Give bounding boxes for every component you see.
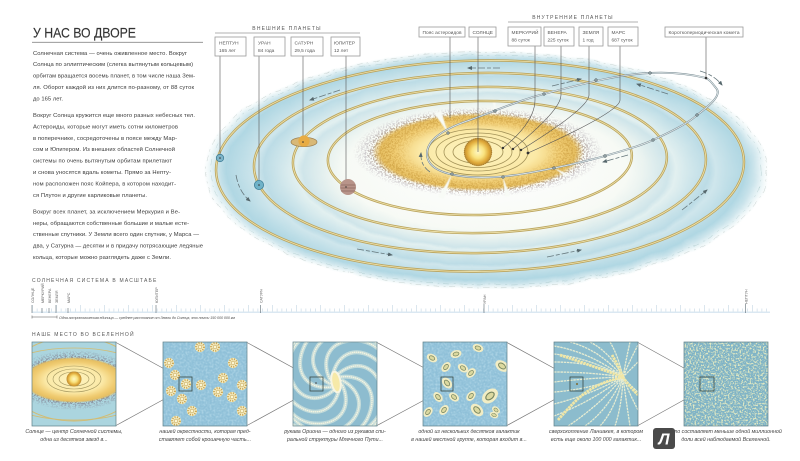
caption 1: одна из десятков звезд в... xyxy=(40,437,108,443)
text block: intro: орбитам вращается восемь планет, в том числе наша Зем- xyxy=(33,74,195,80)
heading: our place in the universe: НАШЕ МЕСТО ВО ВСЕЛЕННОЙ xyxy=(32,330,135,338)
ruler planet labels xyxy=(31,283,748,304)
label: Mercury xyxy=(502,27,541,149)
label: short-period comet: Короткопериодическая комета xyxy=(668,30,740,36)
ruler planet labels: СОЛНЦЕ xyxy=(31,287,35,303)
text block: small bodies: Астероиды, которые могут иметь сотни километров xyxy=(33,124,178,130)
text block: small bodies xyxy=(33,113,195,199)
label: Sun: СОЛНЦЕ xyxy=(472,30,493,36)
panel: solar system xyxy=(32,342,116,426)
text block: intro: до 165 лет. xyxy=(33,96,63,102)
caption 1 xyxy=(25,428,123,443)
outer orbits xyxy=(214,56,746,276)
label: Neptune xyxy=(215,37,246,158)
title: У НАС ВО ДВОРЕ xyxy=(33,24,136,40)
planet: Neptune xyxy=(216,154,224,162)
panel: Orion arm xyxy=(292,342,378,426)
caption 6: доли всей наблюдаемой Вселенной. xyxy=(681,436,771,443)
panel: neighbourhood xyxy=(163,342,247,426)
text block: intro: Солнца по эллиптическим (слегка вытянутым кольцевым) xyxy=(33,62,193,68)
astronomical unit note: Одна астрономическая единица — среднее расстояние от Земли до Солнца, это почти 150 000 000 км xyxy=(59,316,235,320)
inner orbits xyxy=(428,129,528,175)
text block: satellites: два, у Сатурна — десятки и в придачу потрясающие ледяные xyxy=(33,244,203,250)
label: Mars: 687 суток xyxy=(612,38,633,44)
label: Earth: ЗЕМЛЯ xyxy=(582,30,600,36)
caption 5: сверхскопление Ланиакея, в котором xyxy=(549,429,643,435)
ruler planet labels: ЗЕМЛЯ xyxy=(55,290,59,303)
label: Jupiter: 12 лет xyxy=(334,48,349,54)
asteroid belt speckles xyxy=(353,107,603,197)
comet points xyxy=(447,72,698,178)
text block: satellites: ственные спутники. У Земли всего один спутник, у Марса — xyxy=(33,232,199,238)
gold grain over the yellow edge xyxy=(366,110,590,194)
label: asteroid belt xyxy=(419,27,465,118)
text block: intro: Солнечная система — очень оживленное место. Вокруг xyxy=(33,51,187,57)
caption 5: есть еще около 100 000 галактик... xyxy=(551,437,641,443)
label: Uranus: УРАН xyxy=(258,40,271,46)
planet: Saturn xyxy=(291,135,317,147)
label: Saturn: САТУРН xyxy=(294,40,314,46)
caption 4: в нашей местной группе, которая входит в... xyxy=(411,436,527,443)
label group: outer planets xyxy=(215,26,360,187)
label: Earth xyxy=(520,27,603,151)
label: short-period comet xyxy=(665,27,743,79)
comet orbit xyxy=(427,73,718,177)
label: Neptune: 165 лет xyxy=(219,48,237,54)
blue disc xyxy=(203,50,769,290)
label: Saturn: 29,5 года xyxy=(294,48,315,54)
label: Saturn xyxy=(291,37,323,142)
ruler planet labels: МЕРКУРИЙ xyxy=(41,283,45,303)
text block: small bodies: ном расположен пояс Койпера, в котором находит- xyxy=(33,180,176,187)
caption 3: рукава Ориона — одного из рукавов спи- xyxy=(283,429,386,435)
label: Uranus xyxy=(254,37,285,185)
planet: Jupiter xyxy=(340,179,356,195)
caption 6 xyxy=(670,428,782,443)
solar system diagram xyxy=(203,50,769,290)
label: Mercury: 88 суток xyxy=(512,38,531,44)
label: Jupiter: ЮПИТЕР xyxy=(334,40,355,46)
ruler planet labels: ЮПИТЕР xyxy=(155,287,159,303)
sun xyxy=(464,138,492,166)
label: asteroid belt: Пояс астероидов xyxy=(422,30,462,36)
text block: small bodies: сом и Юпитером. Из внешних областей Солнечной xyxy=(33,146,175,153)
direction arrows xyxy=(236,68,722,257)
ruler xyxy=(32,304,770,313)
caption 1: Солнце — центр Солнечной системы, xyxy=(25,428,123,435)
caption 5 xyxy=(549,429,643,443)
label: Mars: МАРС xyxy=(612,30,626,36)
heading: outer planets: ВНЕШНИЕ ПЛАНЕТЫ xyxy=(252,26,322,32)
caption 2 xyxy=(159,428,251,443)
label: Earth: 1 год xyxy=(582,38,594,44)
text block: satellites xyxy=(33,209,203,261)
label: Venus: 225 суток xyxy=(548,38,569,44)
text block: small bodies: Вокруг Солнца кружится еще много разных небесных тел. xyxy=(33,113,195,119)
text block: intro: ля. Оборот каждой из них длится по-разному, от 88 суток xyxy=(33,84,194,91)
belt gaps xyxy=(434,100,570,199)
text block: small bodies: системы по очень вытянутым орбитам прилетают xyxy=(33,159,172,165)
label: Sun xyxy=(469,27,496,152)
connector lines xyxy=(116,342,700,426)
text block: satellites: неры, обращаются собственные большие и малые есте- xyxy=(33,221,189,227)
disc fringe xyxy=(205,52,767,288)
caption 3 xyxy=(283,429,386,443)
caption 4: одной из нескольких десятков галактик xyxy=(418,428,520,435)
label: Jupiter xyxy=(331,37,360,187)
label group: inner planets xyxy=(502,15,638,154)
caption 2: ставляет собой крошечную часть... xyxy=(159,436,251,443)
text block: intro xyxy=(33,51,195,102)
heading: inner planets: ВНУТРЕННИЕ ПЛАНЕТЫ xyxy=(532,15,614,21)
caption 4 xyxy=(411,428,527,443)
planet: Uranus xyxy=(254,180,264,190)
panel: observable universe xyxy=(684,342,768,426)
watermark logo xyxy=(653,428,675,449)
ruler planet labels: ВЕНЕРА xyxy=(48,288,52,303)
scale section xyxy=(31,278,770,320)
caption 3: ральной структуры Млечного Пути... xyxy=(286,436,383,443)
heading: scale: СОЛНЕЧНАЯ СИСТЕМА В МАСШТАБЕ xyxy=(32,278,158,284)
yellow inner zone xyxy=(372,113,584,191)
label: Venus: ВЕНЕРА xyxy=(548,30,567,36)
ruler planet labels: НЕПТУН xyxy=(744,289,748,304)
text block: satellites: Вокруг всех планет, за исключением Меркурия и Ве- xyxy=(33,209,180,215)
ruler planet labels: МАРС xyxy=(67,292,71,303)
ruler planet labels: УРАН xyxy=(483,294,487,304)
ruler planet labels: САТУРН xyxy=(260,288,264,303)
text block: small bodies: в поперечнике, сосредоточены в поясе между Мар- xyxy=(33,136,177,142)
label: Neptune: НЕПТУН xyxy=(219,40,239,46)
caption 2: нашей окрестности, которая пред- xyxy=(159,428,251,435)
label: Uranus: 84 года xyxy=(258,48,275,54)
watermark logo: Л xyxy=(658,432,670,448)
label: Venus xyxy=(512,27,574,150)
text block: satellites: кольца, которые можно разглядеть даже с Земли. xyxy=(33,255,171,261)
label: Mars xyxy=(527,27,638,154)
text block: small bodies: и снова уносятся вдаль кометы. Прямо за Непту- xyxy=(33,170,171,176)
panel: local group xyxy=(421,342,511,426)
text block: small bodies: ся Плутон и другие карликовые планеты. xyxy=(33,193,147,199)
label: Mercury: МЕРКУРИЙ xyxy=(512,28,539,36)
caption 6: что составляет меньше одной миллионной xyxy=(670,428,782,435)
panel: Laniakea xyxy=(554,342,638,426)
